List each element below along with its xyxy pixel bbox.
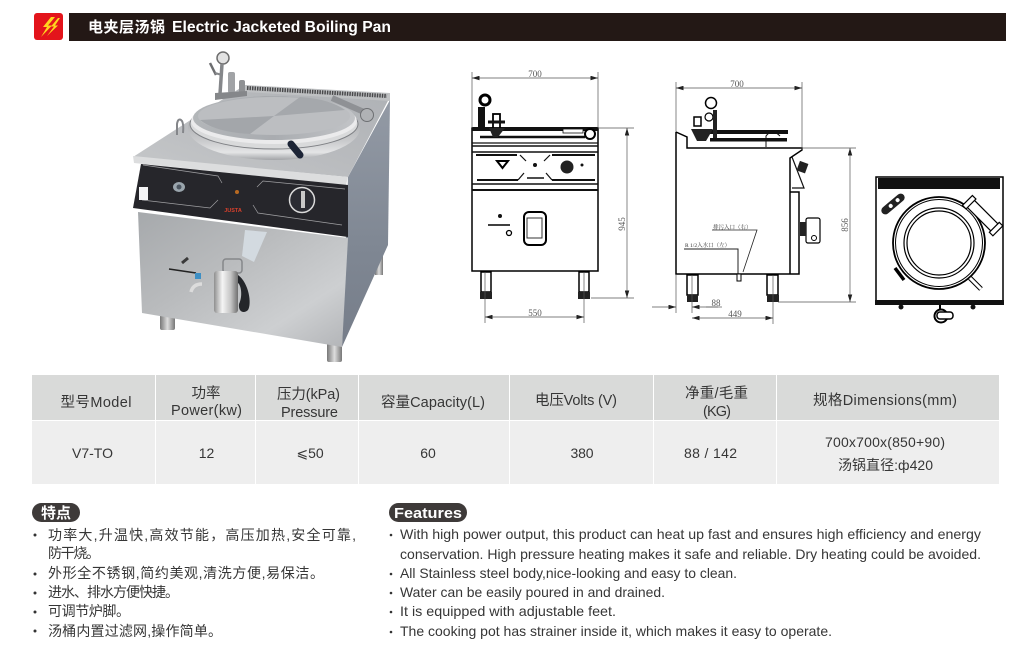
heading pill: Features: Features: [394, 505, 462, 522]
dimension: offset 88: 88: [712, 298, 721, 308]
thermostat knob: [290, 188, 314, 212]
outer square: [876, 177, 1003, 304]
lid and tubes: [710, 130, 788, 147]
table header row: Pressure: [281, 405, 338, 421]
dimension: offset 88: [652, 275, 722, 313]
table data row: [32, 421, 999, 484]
Chinese feature list: 防干烧。: [48, 545, 100, 561]
English feature list: It is equipped with adjustable feet.: [400, 603, 616, 619]
dimension: depth 700: [676, 79, 802, 150]
certificate sticker: [139, 187, 148, 200]
water tap: [169, 258, 202, 292]
side valve: [800, 218, 820, 243]
dimension: foot spacing 449: [692, 275, 773, 324]
counter rim and panel lines: [472, 127, 598, 190]
dimension: height 945: [591, 128, 634, 298]
table header row: [32, 375, 999, 421]
work top front lip: [133, 156, 348, 185]
dimension: depth 700: 700: [730, 79, 744, 89]
hinge arm: [962, 195, 1003, 236]
cabinet front: [138, 212, 348, 347]
table data row: 88 / 142: [684, 445, 737, 461]
heading pill: 特点: [32, 503, 80, 522]
lid handle right: [563, 129, 595, 139]
table header row: 型号Model: [60, 394, 132, 411]
header icon: lightning: [34, 13, 63, 40]
dimension: width 700: [472, 69, 598, 128]
cabinet side: [342, 100, 390, 347]
reflection on front: [242, 230, 267, 262]
control panel slope: [792, 157, 804, 188]
dimension: foot spacing 550: [485, 272, 584, 323]
lid handle rod: [291, 144, 300, 155]
pressure gauge and valves: [210, 52, 247, 100]
panel knobs: [497, 160, 584, 178]
back vent: [878, 178, 1000, 189]
indicator light: [235, 190, 239, 194]
back right foot: [375, 256, 383, 275]
table header row: 功率: [192, 385, 220, 402]
lid handle: [970, 278, 981, 289]
English feature list: Water can be easily poured in and drained.: [400, 584, 665, 600]
table header row: 规格Dimensions(mm): [813, 392, 957, 409]
Chinese feature list: 功率大,升温快,高效节能，高压加热,安全可靠,: [48, 527, 356, 543]
drain valve and tap: [488, 212, 546, 245]
left tap knob: [173, 182, 185, 192]
front valve: [898, 304, 976, 322]
pot rings: [893, 197, 985, 289]
control panel: [133, 164, 348, 237]
dimension: height 856: [778, 148, 856, 302]
feet: [480, 272, 590, 299]
dimension: foot spacing 550: 550: [528, 308, 542, 318]
Chinese feature list: 进水、排水方便快捷。: [48, 584, 179, 600]
Chinese feature list: 汤桶内置过滤网,操作简单。: [48, 623, 222, 639]
dimension: foot spacing 449: 449: [728, 309, 742, 319]
pipe label: outlet: [712, 223, 757, 272]
heading pill: 特点: 特点: [41, 504, 71, 522]
dimension: height 945: 945: [617, 217, 627, 231]
top view drawing: [875, 177, 1004, 322]
pot lid ring: [191, 98, 357, 144]
front elevation drawing: [472, 69, 634, 323]
table data row: 汤锅直径:ф420: [838, 457, 933, 473]
side elevation drawing: [652, 79, 856, 324]
front edge: [875, 300, 1004, 305]
panel knob: [797, 161, 808, 173]
English feature list: conservation. High pressure heating makes it safe and reliable. Dry heating could be avoided.: [400, 546, 981, 562]
centre foot: [327, 343, 342, 362]
header title bar: [69, 13, 1006, 41]
table header row: 容量Capacity(L): [381, 394, 485, 411]
lid inner disc: [198, 97, 350, 135]
gauge assembly: [880, 192, 906, 216]
body outline: [676, 132, 802, 274]
dimension: width 700: 700: [528, 69, 542, 79]
gauge and valves: [691, 98, 717, 141]
left foot: [160, 314, 175, 330]
rim groove: [190, 99, 358, 149]
drain valve with handle: [214, 259, 250, 313]
body outline: [472, 128, 598, 271]
table header row: Power(kw): [171, 403, 242, 419]
English feature list: The cooking pot has strainer inside it, which makes it easy to operate.: [400, 623, 832, 639]
English feature list: [390, 526, 981, 639]
left hook: [895, 268, 904, 280]
outer pot rim: [188, 96, 360, 160]
back vent grille: [245, 85, 390, 101]
table header row: 压力(kPa): [277, 386, 340, 403]
specification table: [32, 375, 999, 484]
English feature list: All Stainless steel body,nice-looking and easy to clean.: [400, 565, 737, 581]
left hook: [177, 120, 183, 135]
brand logo: JUSTA: [224, 208, 242, 214]
table data row: ⩽50: [296, 445, 324, 461]
feet: [687, 275, 779, 302]
Chinese feature list: 外形全不锈钢,简约美观,清洗方便,易保洁。: [48, 565, 324, 581]
table data row: 380: [570, 445, 594, 461]
dimension: height 856: 856: [840, 218, 850, 232]
table data row: V7-TO: [72, 445, 113, 461]
work top: [133, 85, 390, 177]
pipe label: outlet: 排污入口（右）: [713, 223, 752, 231]
table data row: 60: [420, 445, 436, 461]
hinge pipe: [332, 98, 374, 122]
gauge and valves: [478, 95, 505, 137]
table header row: (KG): [703, 404, 731, 420]
table data row: 12: [199, 445, 214, 461]
table data row: 700x700x(850+90): [825, 434, 945, 450]
pipe label: inlet: R 1/2入水口（左）: [685, 241, 730, 249]
product photo: boiling pan: [133, 52, 390, 362]
header title bar: 电夹层汤锅: [88, 18, 165, 36]
Chinese feature list: [34, 527, 356, 639]
pot lid surface: [193, 96, 355, 140]
pipe label: inlet: [684, 241, 741, 281]
Chinese feature list: 可调节炉脚。: [48, 603, 130, 619]
header title bar: Electric Jacketed Boiling Pan: [172, 19, 391, 36]
table header row: 净重/毛重: [685, 385, 748, 402]
table header row: 电压Volts (V): [535, 392, 617, 409]
English feature list: With high power output, this product can heat up fast and ensures high efficiency and energy: [400, 526, 981, 542]
